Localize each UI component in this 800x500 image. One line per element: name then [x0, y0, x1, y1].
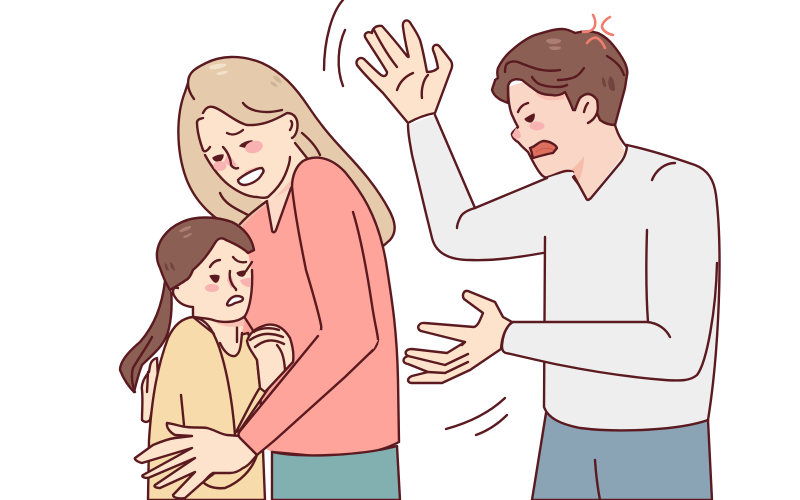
child head [157, 218, 254, 327]
figure: woman [178, 57, 400, 500]
sweater sleeve cuff [238, 330, 378, 455]
man lower arm sleeve [502, 263, 717, 380]
woman hand on child's back [135, 423, 257, 498]
child shirt [148, 316, 268, 500]
motion lines: raised hand [324, 0, 345, 86]
woman hair [178, 57, 395, 250]
man neck and face [508, 70, 627, 200]
child hand behind [142, 358, 158, 422]
figure: child [120, 218, 293, 500]
child ponytail [120, 281, 172, 392]
figure: man [357, 15, 720, 500]
man lower hand [404, 291, 512, 383]
woman face [197, 103, 320, 215]
man raised hand [357, 20, 452, 123]
woman left brow and eyes [213, 130, 252, 161]
woman trousers [272, 446, 400, 500]
man sweater and arm [408, 115, 720, 430]
anger mark [583, 15, 613, 48]
woman sweater [215, 158, 399, 457]
man trousers [532, 413, 712, 500]
motion lines: lower hand [446, 398, 507, 435]
man hair [492, 29, 627, 125]
man ear [575, 94, 598, 123]
child hand on chest [245, 318, 293, 392]
